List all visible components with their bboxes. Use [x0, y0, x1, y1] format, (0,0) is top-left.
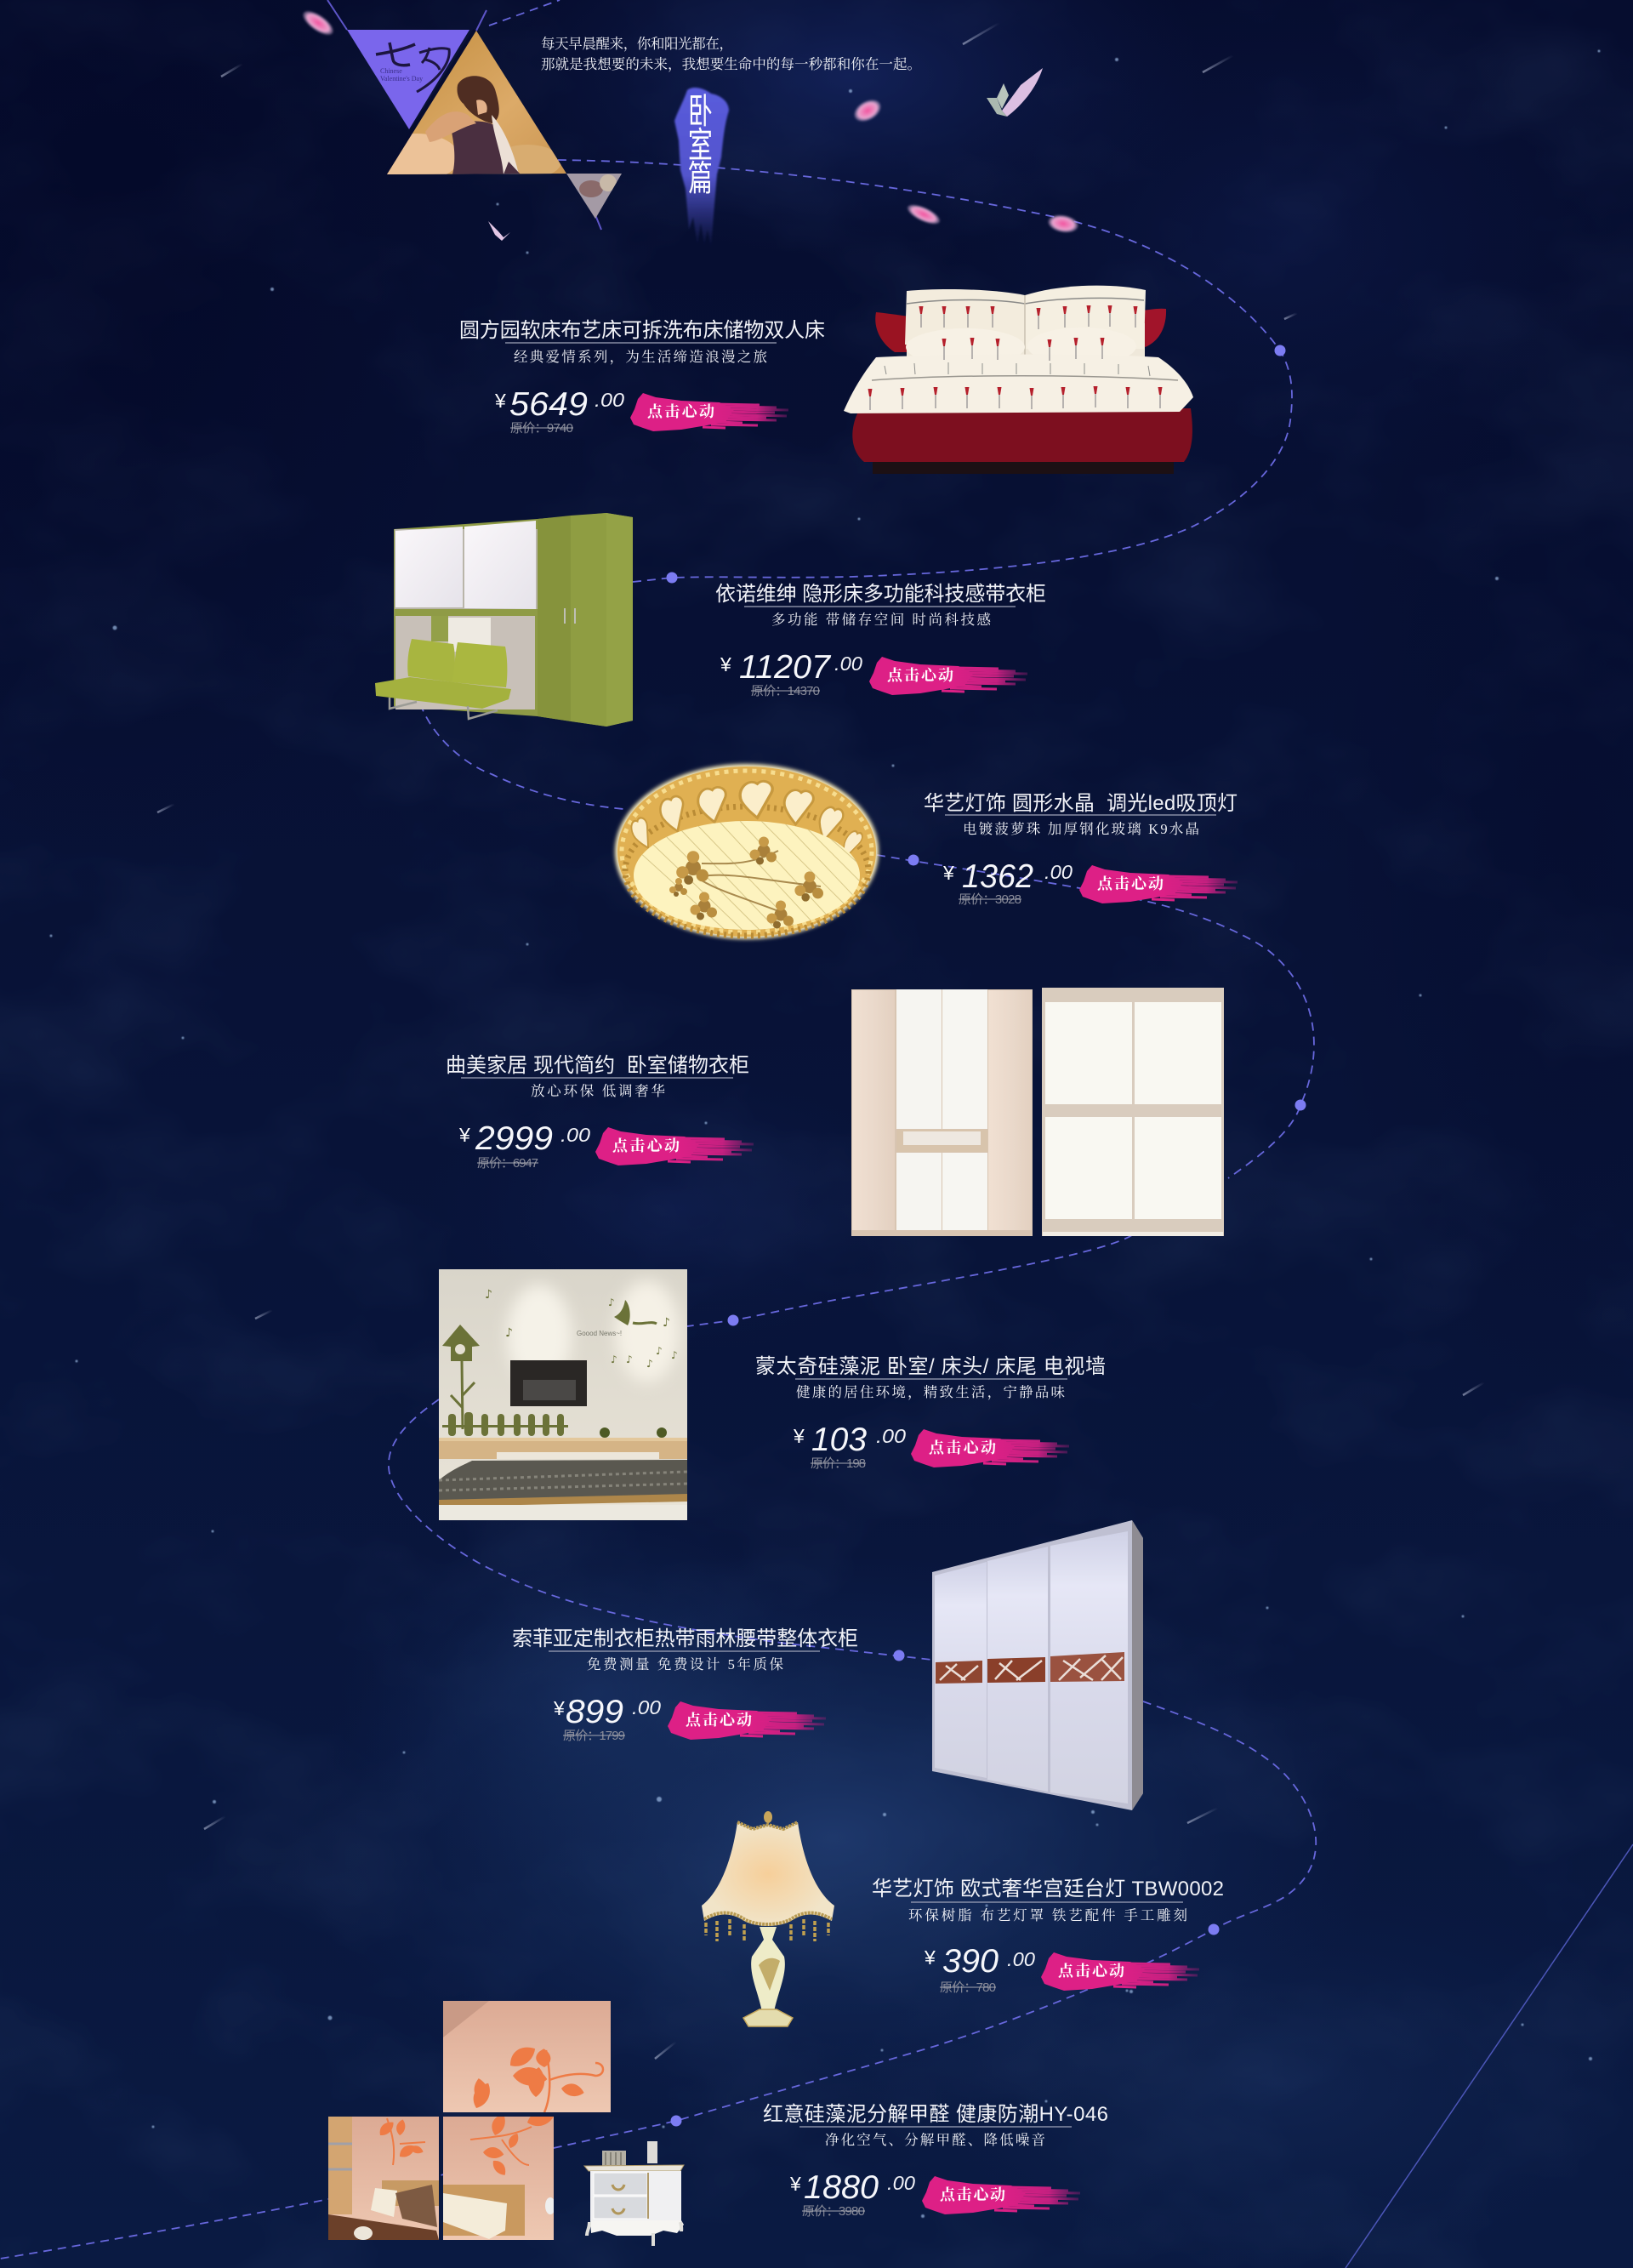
product 4 text: 点击心动	[612, 1137, 680, 1154]
product 7 text: 华艺灯饰 欧式奢华宫廷台灯 TBW0002	[872, 1878, 1224, 1900]
header poem: 那就是我想要的未来，我想要生命中的每一秒都和你在一起。	[541, 56, 921, 72]
product 4 text: 放心环保 低调奢华	[531, 1083, 665, 1099]
section heading brush: 卧室篇: 室	[688, 118, 713, 168]
product 5 text: 点击心动	[929, 1439, 996, 1456]
product 5 text: 原价：198	[811, 1456, 866, 1471]
product 3 text: .00	[1044, 861, 1073, 883]
product 3 text: 1362	[962, 858, 1033, 895]
product 2 image: wardrobe with sofa bed	[375, 513, 633, 727]
product 1 text: 原价：9740	[510, 421, 573, 436]
product 5 image: wall decoration room: ♪	[505, 1326, 513, 1340]
product 6 text: 原价：1799	[563, 1729, 625, 1743]
product 4 text	[446, 1054, 754, 1171]
product 4 text: 原价：6947	[477, 1156, 538, 1171]
section heading brush: 卧室篇: 篇	[688, 151, 713, 202]
product 5 image: wall decoration room: ♪	[485, 1288, 492, 1302]
header poem: 每天早晨醒来，你和阳光都在，	[541, 36, 733, 52]
product 3 text: 华艺灯饰 圆形水晶 调光led吸顶灯	[924, 792, 1238, 815]
product 8 images: wall decoration panels	[328, 2001, 611, 2240]
section heading brush: 卧室篇: 卧	[688, 84, 713, 134]
product 4 text: ¥	[458, 1124, 470, 1146]
product 5 text: 103	[811, 1422, 867, 1458]
product 5 text: 蒙太奇硅藻泥 卧室/ 床头/ 床尾 电视墙	[755, 1355, 1106, 1378]
product 6 text: 免费测量 免费设计 5年质保	[587, 1655, 784, 1673]
product 5 text: .00	[876, 1425, 906, 1447]
product 1 text: ¥	[494, 390, 506, 412]
section heading brush: 卧室篇	[674, 84, 729, 248]
product 5 image: wall decoration room: Goood News~!	[577, 1330, 622, 1337]
product 1 text: 5649	[509, 386, 588, 423]
product 2 text: 多功能 带储存空间 时尚科技感	[771, 612, 992, 628]
product 8 text	[763, 2103, 1108, 2219]
product 4 text: .00	[560, 1124, 590, 1146]
product 2 text: 依诺维绅 隐形床多功能科技感带衣柜	[715, 583, 1046, 606]
product 1 text	[459, 319, 825, 436]
product 1 text: 点击心动	[647, 403, 714, 420]
product 7 text	[872, 1878, 1224, 1995]
product 8 text: 1880	[804, 2169, 879, 2206]
diagonal light line	[1346, 1844, 1633, 2268]
product 8 text: ¥	[789, 2173, 801, 2195]
product 2 text: 原价：14370	[751, 684, 820, 698]
product 3 image: crystal ceiling lamp	[615, 764, 879, 939]
product 6 text: 索菲亚定制衣柜热带雨林腰带整体衣柜	[512, 1627, 858, 1650]
product 8 text: 原价：3980	[802, 2204, 865, 2219]
product 7 image: table lamp	[702, 1811, 834, 2026]
product 7 text: 环保树脂 布艺灯罩 铁艺配件 手工雕刻	[908, 1907, 1187, 1923]
header poem	[541, 36, 921, 72]
product 1 image: bed	[844, 286, 1193, 474]
product 6 text: 899	[566, 1694, 623, 1730]
product 5 text	[755, 1355, 1106, 1471]
product 5 image: wall decoration room: ♪	[646, 1358, 653, 1370]
product 5 image: wall decoration room: ♪	[608, 1296, 615, 1308]
product 6 text	[512, 1627, 858, 1743]
product 2 text: .00	[834, 652, 862, 675]
product 5 image: wall decoration room: ♪	[611, 1353, 617, 1365]
product 8 text: 红意硅藻泥分解甲醛 健康防潮HY-046	[763, 2103, 1108, 2126]
product 3 text: ¥	[942, 862, 954, 884]
product 4 text: 2999	[475, 1120, 553, 1157]
product 1 text: .00	[595, 389, 624, 411]
product 4 image: two wardrobes	[851, 988, 1224, 1236]
product 8 text: 点击心动	[940, 2186, 1005, 2203]
product 7 text: .00	[1007, 1948, 1035, 1970]
product 6 image: sliding wardrobe	[932, 1520, 1143, 1810]
product 2 text: 11207	[739, 649, 831, 686]
product 1 text: 圆方园软床布艺床可拆洗布床储物双人床	[459, 319, 825, 342]
product 5 image: wall decoration room: ♪	[671, 1349, 678, 1361]
product 8 text: 净化空气、分解甲醛、降低噪音	[825, 2132, 1045, 2148]
product 8 text: .00	[887, 2172, 915, 2194]
falling petals and paper cranes	[299, 7, 1079, 241]
product 6 text: 点击心动	[686, 1712, 752, 1729]
product 4 text: 曲美家居 现代简约 卧室储物衣柜	[446, 1054, 749, 1077]
product 7 text: 原价：780	[940, 1980, 996, 1995]
product 5 text: ¥	[793, 1425, 805, 1447]
product 1 text: 经典爱情系列，为生活缔造浪漫之旅	[514, 349, 767, 365]
header emblem: triangles: Valentine's Day	[380, 75, 423, 83]
product 5 image: wall decoration room: ♪	[656, 1345, 663, 1357]
product 7 text: 点击心动	[1058, 1963, 1124, 1980]
product 3 text: 原价：3028	[959, 892, 1021, 907]
product 3 text	[924, 792, 1238, 907]
product 2 text: ¥	[720, 653, 731, 675]
product 5 text: 健康的居住环境，精致生活，宁静品味	[796, 1384, 1065, 1400]
product 5 image: wall decoration room: ♪	[626, 1353, 633, 1365]
product 6 text: ¥	[553, 1697, 565, 1719]
product 7 text: ¥	[924, 1946, 936, 1969]
product 7 text: 390	[942, 1943, 999, 1980]
product 8 image: nightstand	[584, 2141, 684, 2246]
product 5 image: wall decoration room: ♪	[663, 1316, 670, 1330]
product 5 image: wall decoration room	[439, 1269, 687, 1520]
header emblem: triangles: Chinese	[380, 67, 402, 75]
header emblem: triangles	[327, 0, 629, 230]
product 3 text: 电镀菠萝珠 加厚钢化玻璃 K9水晶	[963, 820, 1199, 837]
product 3 text: 点击心动	[1097, 875, 1164, 892]
product 6 text: .00	[632, 1696, 661, 1718]
route dots	[667, 345, 1306, 2127]
product 2 text: 点击心动	[887, 667, 953, 684]
product 2 text	[715, 583, 1046, 698]
